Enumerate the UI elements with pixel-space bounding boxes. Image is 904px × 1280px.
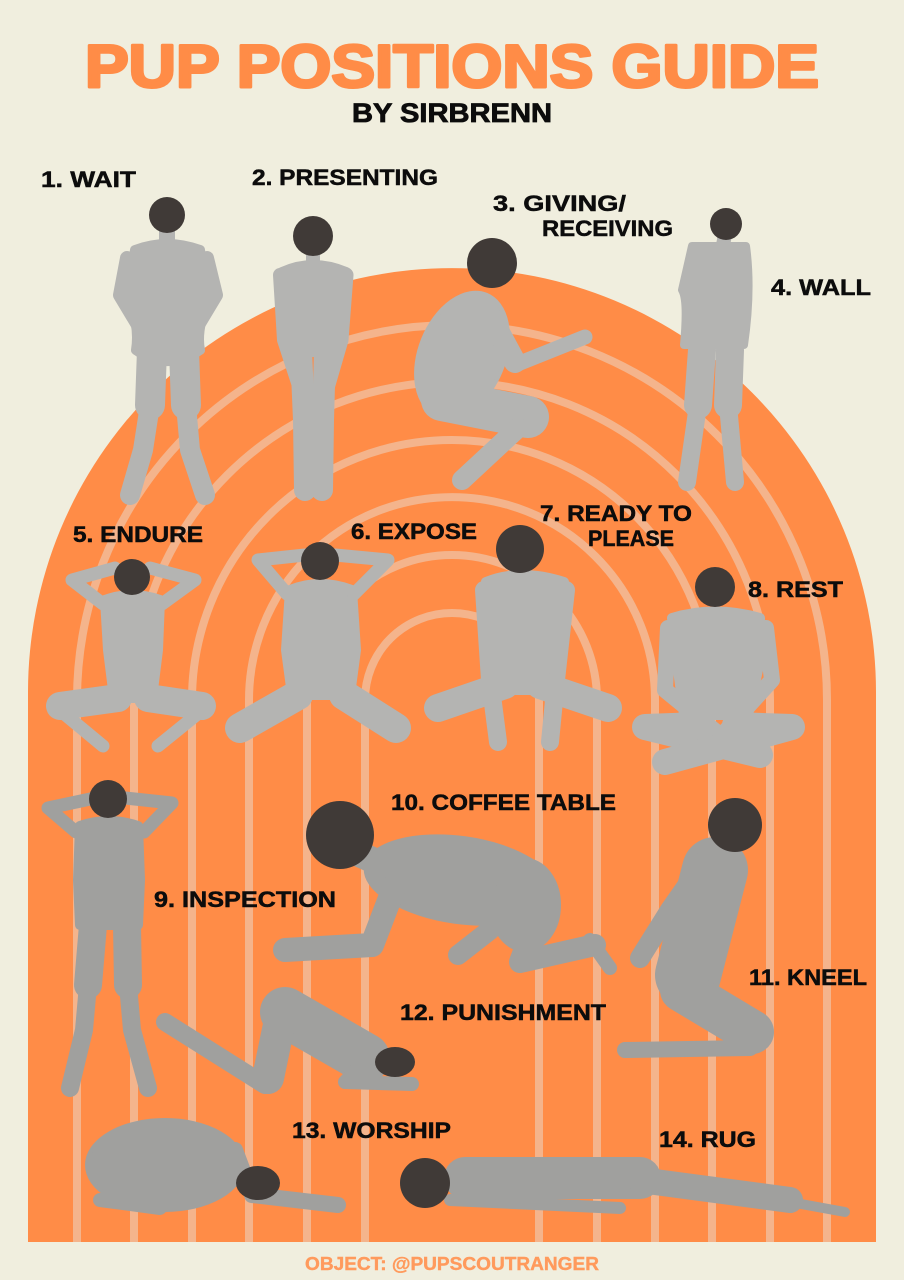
label 4: 4. WALL: [771, 275, 871, 300]
orange arch background: [28, 268, 876, 1242]
figure 1: wait: [120, 197, 216, 495]
label 7: 7. READY TO: [540, 501, 692, 526]
figure 3: giving/receiving: [399, 238, 585, 480]
figure 8: rest: [645, 567, 792, 762]
footer credit: OBJECT: @PUPSCOUTRANGER: [305, 1254, 599, 1274]
figure 7: ready to please: [438, 525, 608, 742]
figure 10: coffee table: [285, 801, 610, 968]
figure 5: endure: [60, 559, 202, 746]
figure 12: punishment: [165, 1012, 415, 1085]
label 14: 14. RUG: [659, 1127, 756, 1152]
figure 2: presenting: [280, 216, 346, 490]
label 2: 2. PRESENTING: [252, 165, 438, 190]
label 11: 11. KNEEL: [749, 965, 867, 990]
label 9: 9. INSPECTION: [154, 887, 336, 912]
label 10: 10. COFFEE TABLE: [391, 790, 616, 815]
label 1: 1. WAIT: [41, 167, 137, 192]
label 8: 8. REST: [748, 577, 844, 602]
label 3: [493, 191, 673, 241]
subtitle: BY SIRBRENN: [352, 98, 552, 128]
label 6: 6. EXPOSE: [351, 519, 477, 544]
label 3: RECEIVING: [542, 216, 673, 241]
figure 13: worship: [87, 1120, 338, 1210]
label 7: [540, 501, 692, 551]
label 3: 3. GIVING/: [493, 191, 626, 216]
label 12: 12. PUNISHMENT: [400, 1000, 607, 1025]
figure 4: wall: [682, 208, 749, 482]
label 7: PLEASE: [588, 526, 674, 551]
figure 6: expose: [240, 542, 396, 728]
label 13: 13. WORSHIP: [292, 1118, 451, 1143]
title: PUP POSITIONS GUIDE: [85, 33, 819, 100]
figure 9: inspection: [48, 780, 172, 1088]
figure 11: kneel: [625, 798, 762, 1050]
label 5: 5. ENDURE: [73, 522, 203, 547]
figure 14: rug: [400, 1158, 845, 1212]
